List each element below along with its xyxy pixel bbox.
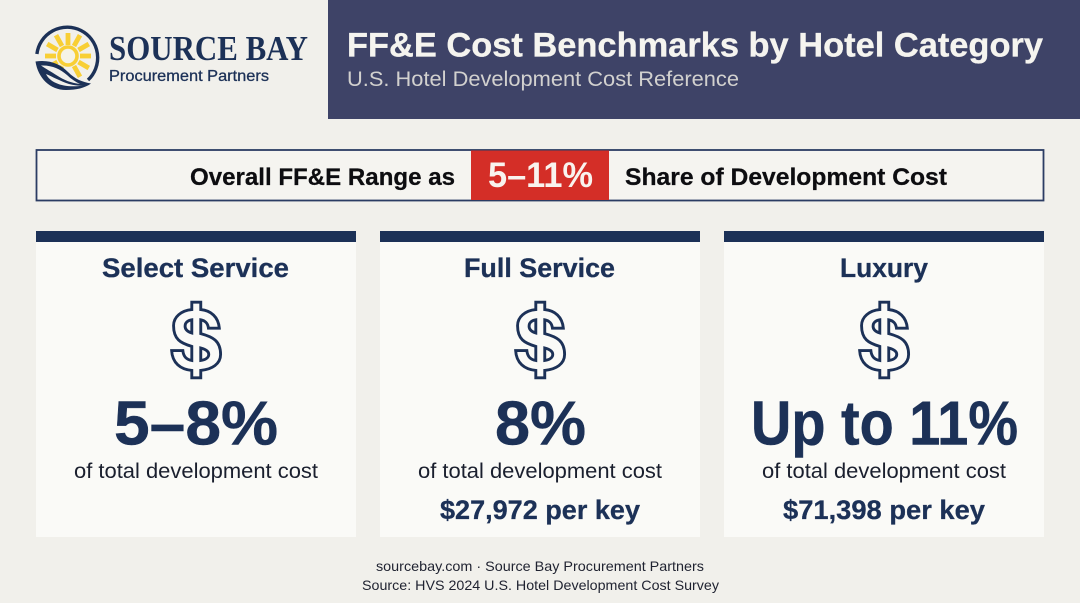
tagline: Procurement Partners (109, 68, 269, 85)
header banner (328, 0, 1080, 119)
panel: Select Service (36, 231, 356, 537)
heading: Luxury (840, 253, 928, 283)
percentage: 5–8% (114, 390, 278, 458)
subtitle: U.S. Hotel Development Cost Reference (347, 67, 739, 91)
red badge: 5–11% (471, 150, 609, 200)
footer source line: Source: HVS 2024 U.S. Hotel Development Cost Survey (362, 577, 719, 593)
wordmark: SOURCE BAY (109, 29, 308, 68)
callout label left: Overall FF&E Range as (190, 164, 455, 191)
icon: dollar sign (860, 302, 909, 378)
caption: of total development cost (418, 459, 662, 483)
footer site line: sourcebay.com · Source Bay Procurement Partners (376, 558, 704, 574)
footer (362, 558, 719, 593)
heading: Full Service (464, 253, 615, 283)
per key cost: $27,972 per key (440, 495, 640, 525)
callout: overall FF&E range (36, 150, 1044, 200)
logo: Source Bay Procurement Partners (36, 27, 308, 90)
percentage: 8% (495, 390, 586, 458)
per key cost: $71,398 per key (783, 495, 985, 525)
heading: Select Service (102, 253, 289, 283)
icon: dollar sign (172, 302, 221, 378)
panel: Luxury (724, 231, 1044, 537)
caption: of total development cost (762, 459, 1006, 483)
panel: Full Service (380, 231, 700, 537)
percentage: Up to 11% (751, 390, 1018, 458)
callout label right: Share of Development Cost (625, 164, 947, 191)
red badge: 5–11%: 5–11% (488, 156, 593, 195)
caption: of total development cost (74, 459, 318, 483)
title: FF&E Cost Benchmarks by Hotel Category (347, 26, 1043, 64)
icon: dollar sign (516, 302, 565, 378)
icon: sun over waves (36, 27, 98, 90)
